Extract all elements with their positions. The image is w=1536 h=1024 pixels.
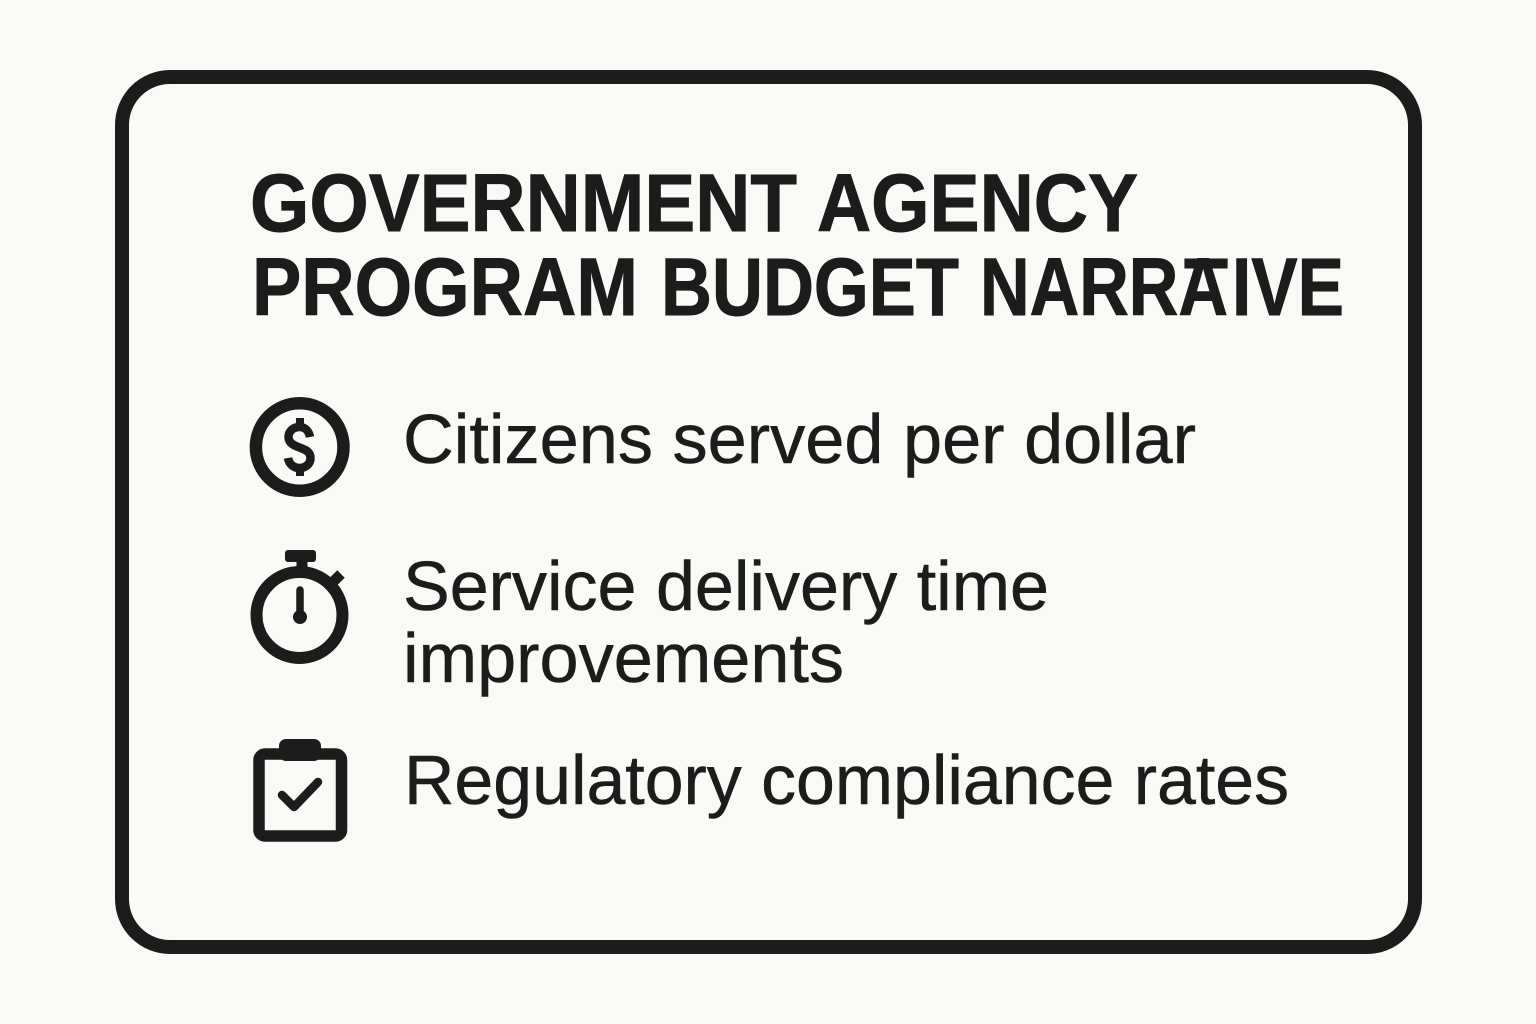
title bbox=[252, 174, 1342, 316]
title: BUDGET bbox=[661, 242, 959, 333]
icon: dollar coin bbox=[256, 403, 344, 491]
text: regulatory compliance rates: Regulatory compliance rates bbox=[404, 741, 1289, 819]
text: citizens served per dollar: Citizens served per dollar bbox=[403, 400, 1196, 478]
panel: rounded frame bbox=[122, 77, 1415, 947]
text: service delivery time improvements bbox=[403, 547, 1049, 697]
icon: stopwatch bbox=[256, 550, 342, 658]
title: NARRA bbox=[980, 242, 1228, 333]
title: IVE bbox=[1232, 242, 1344, 333]
text: service delivery time improvements: Service delivery time bbox=[403, 547, 1049, 625]
text: service delivery time improvements: improvements bbox=[403, 619, 844, 697]
icon: clipboard with check bbox=[259, 739, 342, 836]
title: T bbox=[1184, 242, 1228, 333]
title: GOVERNMENT bbox=[250, 158, 797, 249]
title: PROGRAM bbox=[252, 242, 638, 333]
title: AGENCY bbox=[817, 158, 1138, 249]
